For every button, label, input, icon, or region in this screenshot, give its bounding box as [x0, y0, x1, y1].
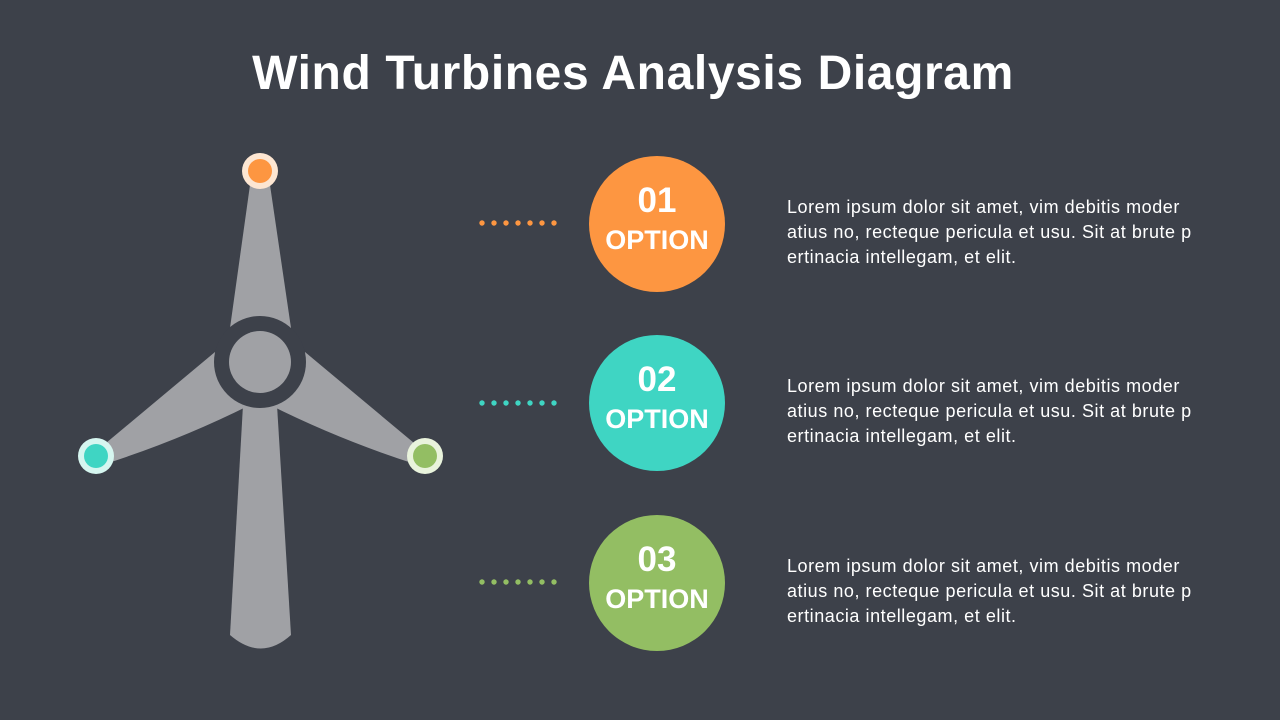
option circle 03	[589, 515, 725, 651]
option circle 02: 02	[638, 360, 676, 399]
text block 01: atius no, recteque pericula et usu. Sit at brute p	[787, 222, 1192, 242]
option circle 02	[589, 335, 725, 471]
text block 03: atius no, recteque pericula et usu. Sit at brute p	[787, 581, 1192, 601]
title: Wind Turbines Analysis Diagram	[252, 47, 1014, 100]
option circle 02: OPTION	[605, 404, 709, 434]
icon: blade tip 01	[242, 153, 278, 189]
text block 01: ertinacia intellegam, et elit.	[787, 247, 1017, 267]
option circle 01: 01	[638, 181, 676, 220]
dotted connector 01	[479, 220, 557, 226]
option circle 01: OPTION	[605, 225, 709, 255]
text block 01: Lorem ipsum dolor sit amet, vim debitis moder	[787, 197, 1180, 217]
text block 02: ertinacia intellegam, et elit.	[787, 426, 1017, 446]
option circle 03: 03	[638, 540, 676, 579]
text block 02	[787, 376, 1192, 446]
icon: blade tip 03	[407, 438, 443, 474]
dotted connector 02	[479, 400, 557, 406]
wind turbine	[78, 153, 443, 648]
text block 02: atius no, recteque pericula et usu. Sit at brute p	[787, 401, 1192, 421]
option circle 03: OPTION	[605, 584, 709, 614]
text block 01	[787, 197, 1192, 267]
text block 03: ertinacia intellegam, et elit.	[787, 606, 1017, 626]
text block 02: Lorem ipsum dolor sit amet, vim debitis moder	[787, 376, 1180, 396]
icon: blade tip 02	[78, 438, 114, 474]
text block 03: Lorem ipsum dolor sit amet, vim debitis moder	[787, 556, 1180, 576]
dotted connector 03	[479, 579, 557, 585]
text block 03	[787, 556, 1192, 626]
option circle 01	[589, 156, 725, 292]
